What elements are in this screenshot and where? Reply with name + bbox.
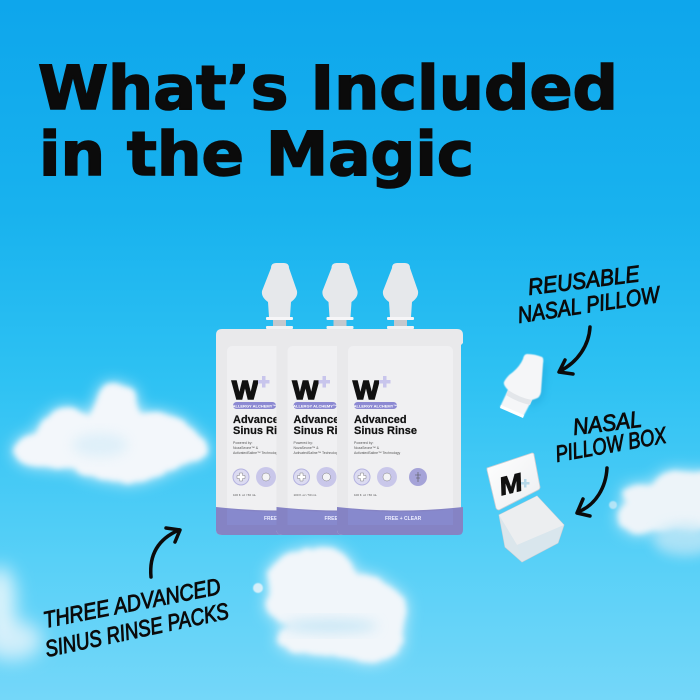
small print: ActivatedSaline™ Technology: [354, 451, 400, 455]
label: three advanced sinus rinse packs: THREE ADVANCED: [41, 573, 223, 633]
logo: W: [353, 375, 379, 405]
label: nasal pillow box: [553, 406, 669, 467]
small print: ActivatedSaline™ Technology: [294, 451, 340, 455]
icon: nasal pillow: [500, 354, 546, 418]
label: nasal pillow box: NASAL: [571, 406, 643, 440]
label: three advanced sinus rinse packs: SINUS RINSE PACKS: [43, 597, 231, 662]
small print: Powered by:: [294, 441, 313, 445]
pack: right: 100 fl. oz / 50 mL: [354, 493, 377, 497]
pouch body: [337, 329, 463, 535]
cloud: upper left: [12, 384, 206, 481]
pack: left: Sinus Rinse: [233, 425, 296, 437]
arrow: to nasal pillow: [559, 327, 590, 374]
label: reusable nasal pillow: [516, 260, 663, 328]
pouch body: [276, 329, 402, 535]
nozzle: [262, 263, 297, 329]
label: three advanced sinus rinse packs: [41, 573, 231, 662]
nozzle: [383, 263, 418, 329]
small print: [233, 441, 279, 455]
label: nasal pillow box: PILLOW BOX: [553, 422, 669, 467]
small print: [354, 441, 400, 455]
small print: [294, 441, 340, 455]
pouch body: [216, 329, 342, 535]
cloud: lower centre: [253, 549, 405, 661]
badge: [233, 402, 276, 409]
box base: [499, 496, 564, 562]
pack: middle: Sinus Rinse: [294, 425, 356, 437]
box lid: M: [496, 468, 527, 501]
title: What’s Included: [38, 53, 618, 124]
label: reusable nasal pillow: NASAL PILLOW: [516, 281, 663, 328]
product name: Advanced: [233, 414, 286, 426]
pack: left: [216, 263, 342, 535]
pack: left: ALLERGY ALCHEMY™: [233, 404, 276, 408]
badges: [233, 467, 306, 487]
pack: left: FREE + CLEAR: [264, 516, 301, 522]
arrow: to box: [577, 468, 607, 516]
badges: [294, 467, 366, 487]
small print: Powered by:: [354, 441, 373, 445]
icon: nasal pillow box: [487, 453, 564, 562]
logo: W: [232, 375, 258, 405]
logo: W: [292, 375, 319, 405]
three sinus rinse packs: [216, 263, 463, 535]
small print: Powered by:: [233, 441, 252, 445]
pack: right: Sinus Rinse: [354, 425, 417, 437]
pack: middle: [276, 263, 402, 535]
pack: middle: ALLERGY ALCHEMY™: [293, 404, 337, 408]
nozzle: [322, 263, 358, 329]
badge: [294, 402, 336, 409]
arrow: to packs: [151, 528, 180, 577]
small print: NozaSeone™ &: [354, 446, 380, 450]
product name: Advanced: [294, 414, 346, 426]
pack: middle: 100 fl. oz / 50 mL: [294, 493, 317, 497]
badges: [354, 467, 427, 487]
pack: middle: FREE + CLEAR: [324, 516, 361, 522]
label: reusable nasal pillow: REUSABLE: [526, 260, 641, 300]
title: [38, 53, 618, 190]
cloud: right edge: [609, 470, 700, 556]
title: in the Magic: [39, 119, 474, 190]
pack: right: ALLERGY ALCHEMY™: [354, 404, 397, 408]
product name: Advanced: [354, 414, 407, 426]
small print: NozaSeone™ &: [294, 446, 319, 450]
pack: right: FREE + CLEAR: [385, 516, 422, 522]
cloud: lower left edge: [0, 566, 42, 660]
pack: left: 100 fl. oz / 50 mL: [233, 493, 256, 497]
pack: right: [337, 263, 463, 535]
badge: [354, 402, 397, 409]
small print: NozaSeone™ &: [233, 446, 259, 450]
small print: ActivatedSaline™ Technology: [233, 451, 279, 455]
